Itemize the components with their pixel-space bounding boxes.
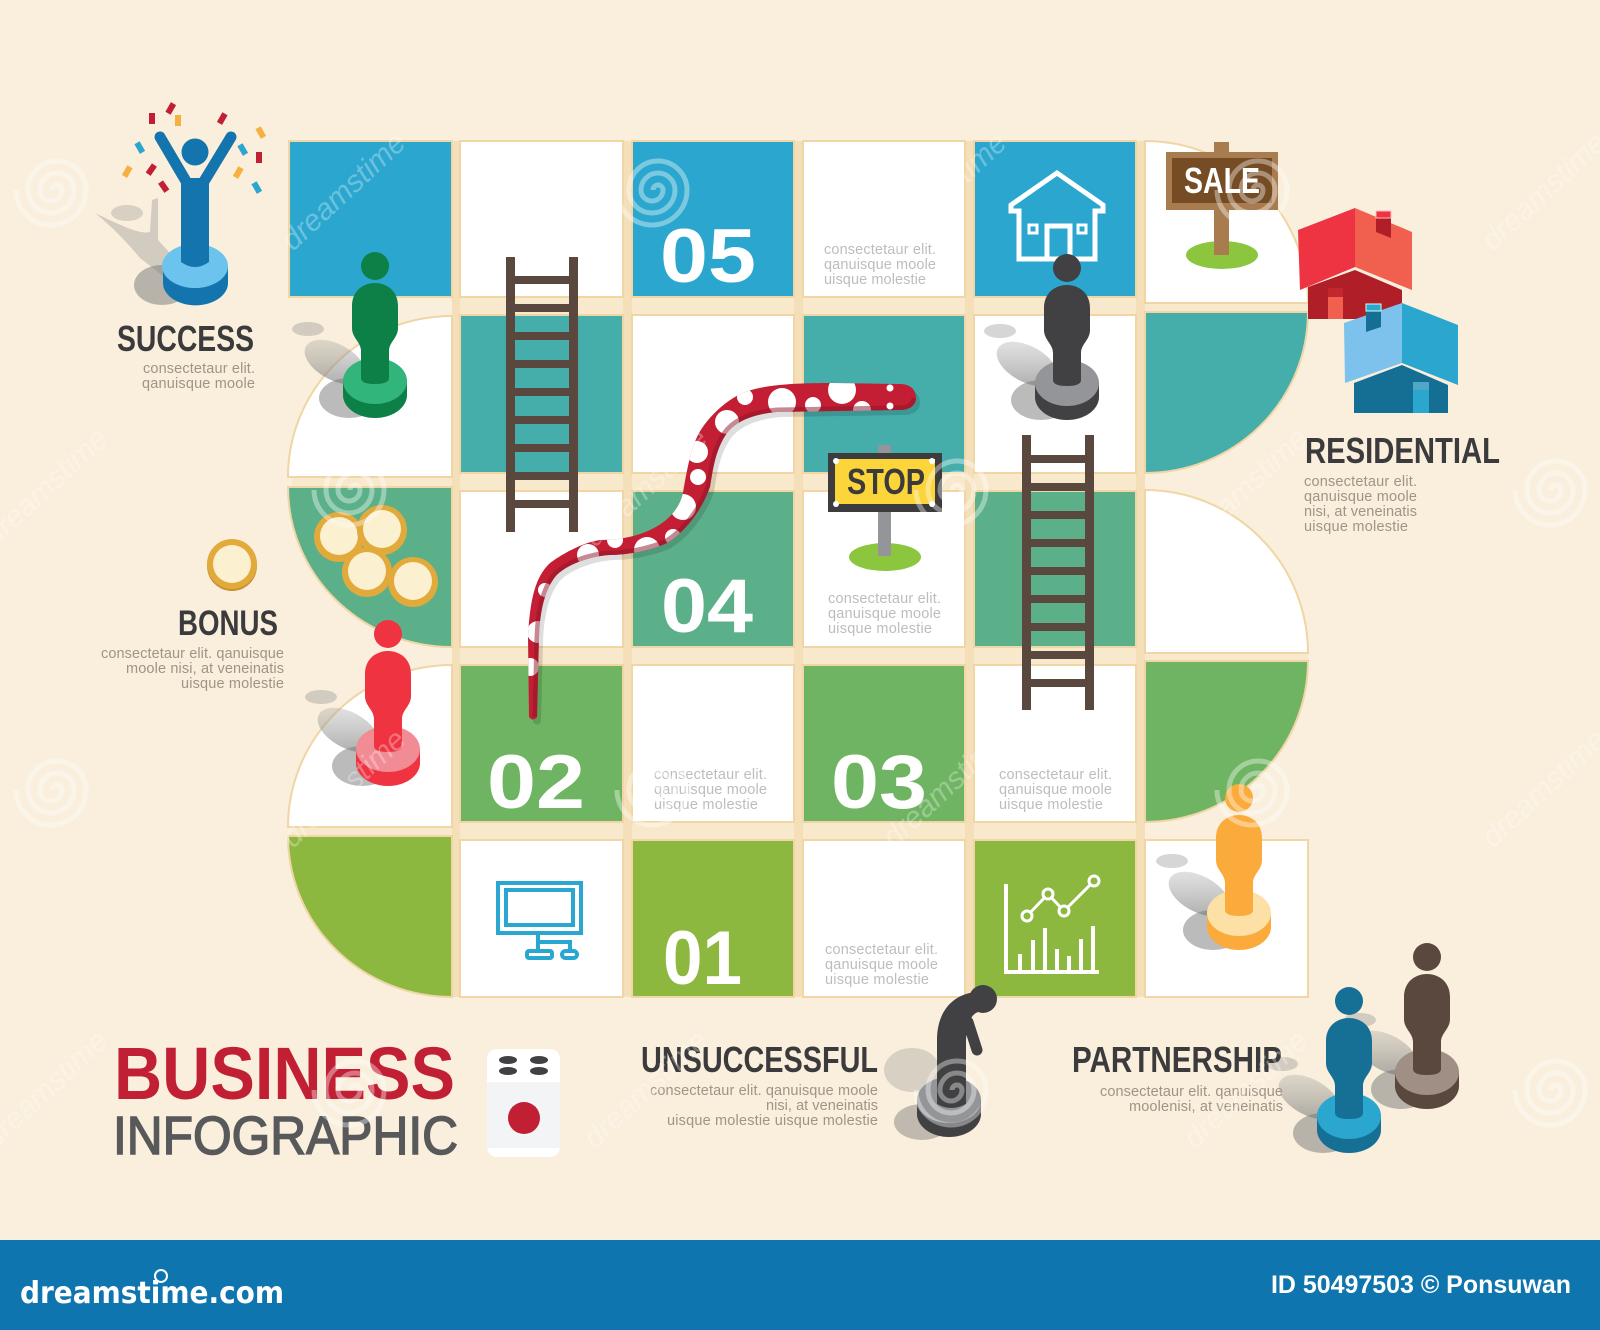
watermark text: dreamstime	[1177, 1024, 1314, 1155]
ladder right	[1022, 435, 1094, 710]
board gutters	[292, 141, 1308, 997]
coins on board	[314, 505, 438, 607]
watermark text: dreamstime	[876, 723, 1013, 854]
watermark text: dreamstime	[275, 723, 412, 854]
text: bonus description: moole nisi, at veneinatis	[126, 661, 284, 677]
cell text: step 01 neighbour	[825, 942, 938, 988]
cell text: step 03 neighbour: qanuisque moole	[999, 782, 1112, 798]
icon: house outline	[1011, 173, 1103, 259]
cell text: stop: qanuisque moole	[828, 606, 941, 622]
text: unsuccessful description: consectetaur elit. qanuisque moole	[650, 1083, 878, 1099]
watermark text: dreamstime	[577, 1024, 714, 1155]
heading: unsuccessful: UNSUCCESSFUL	[641, 1039, 878, 1080]
footer bar: dreamstime.com	[20, 1276, 284, 1311]
cell text: step 02 neighbour: uisque molestie	[654, 797, 758, 813]
text: unsuccessful description: nisi, at veneinatis	[766, 1098, 878, 1114]
watermark text: dreamstime	[577, 422, 714, 553]
heading: residential: RESIDENTIAL	[1305, 430, 1500, 471]
text: residential description	[1304, 474, 1417, 535]
text: residential description: uisque molestie	[1304, 519, 1408, 535]
number 02: 02	[487, 740, 585, 825]
icon: red house	[1298, 208, 1412, 319]
text: bonus description	[101, 646, 284, 692]
watermark spirals	[16, 161, 1585, 1125]
title: BUSINESS	[114, 1032, 455, 1115]
heading: bonus: BONUS	[178, 604, 278, 643]
cell text: step 02 neighbour: consectetaur elit.	[654, 767, 767, 783]
panel: game board	[288, 141, 1308, 997]
pawn: unsuccessful slumped figure	[884, 985, 997, 1140]
heading: partnership: PARTNERSHIP	[1072, 1039, 1282, 1080]
pawn: green	[292, 252, 407, 418]
board row 5	[288, 836, 1308, 997]
title: INFOGRAPHIC	[113, 1106, 458, 1166]
cell text: stop	[828, 591, 941, 637]
text: unsuccessful description	[650, 1083, 878, 1129]
cell text: step 02 neighbour: qanuisque moole	[654, 782, 767, 798]
snake	[521, 376, 920, 724]
ladder left	[506, 257, 578, 532]
stop sign	[828, 445, 942, 571]
sale sign	[1166, 142, 1278, 269]
footer bar	[0, 1240, 1600, 1330]
board row 2	[288, 312, 1308, 477]
cell text: step 05	[824, 242, 936, 288]
cell text: step 05: uisque molestie	[824, 272, 926, 288]
text: partnership description	[1100, 1084, 1283, 1115]
pawn: brown partner	[1344, 943, 1459, 1109]
number 04: 04	[661, 564, 753, 649]
pawn: blue partner	[1266, 987, 1381, 1153]
text: residential description: qanuisque moole	[1304, 489, 1417, 505]
cell text: step 03 neighbour	[999, 767, 1112, 813]
icon: growth chart	[1006, 876, 1099, 972]
pawn: success figure	[95, 102, 266, 305]
title	[113, 1032, 458, 1166]
cell text: step 03 neighbour: uisque molestie	[999, 797, 1103, 813]
number 03: 03	[831, 740, 927, 825]
cell text: step 05: consectetaur elit.	[824, 242, 936, 258]
text: success description: consectetaur elit.	[143, 361, 255, 377]
board row 4	[288, 661, 1308, 827]
text: residential description: nisi, at veneinatis	[1304, 504, 1417, 520]
cell text: step 01 neighbour: consectetaur elit.	[825, 942, 938, 958]
board row 1	[289, 141, 1308, 303]
stop sign: STOP	[847, 461, 925, 502]
number 01: 01	[663, 916, 742, 1001]
watermark text: dreamstime	[876, 126, 1013, 257]
icon: blue house	[1344, 303, 1458, 413]
cell text: stop: uisque molestie	[828, 621, 932, 637]
heading: success: SUCCESS	[117, 318, 254, 359]
pawn: red	[305, 620, 420, 786]
cell text: stop: consectetaur elit.	[828, 591, 941, 607]
watermark text: dreamstime	[1177, 422, 1314, 553]
number 05: 05	[660, 214, 756, 299]
cell text: step 02 neighbour	[654, 767, 767, 813]
icon: bonus coin	[207, 539, 257, 591]
text: unsuccessful description: uisque molestie uisque molestie	[667, 1113, 878, 1129]
icon: computer monitor	[498, 883, 581, 958]
icon: dice	[487, 1049, 560, 1157]
sale sign: SALE	[1184, 160, 1260, 201]
cell text: step 01 neighbour: uisque molestie	[825, 972, 929, 988]
text: bonus description: consectetaur elit. qanuisque	[101, 646, 284, 662]
text: residential description: consectetaur elit.	[1304, 474, 1417, 490]
text: bonus description: uisque molestie	[181, 676, 284, 692]
text: partnership description: moolenisi, at veneinatis	[1129, 1099, 1283, 1115]
pawn: grey	[984, 254, 1099, 420]
text: success description: qanuisque moole	[142, 376, 255, 392]
text: partnership description: consectetaur elit. qanuisque	[1100, 1084, 1283, 1100]
cell text: step 03 neighbour: consectetaur elit.	[999, 767, 1112, 783]
cell text: step 05: qanuisque moole	[824, 257, 936, 273]
board row 3	[288, 487, 1308, 653]
footer bar: ID 50497503 © Ponsuwan	[1271, 1271, 1571, 1299]
cell text: step 01 neighbour: qanuisque moole	[825, 957, 938, 973]
pawn: orange	[1156, 784, 1271, 950]
text: success description	[142, 361, 255, 392]
watermark text: dreamstime	[275, 126, 412, 257]
watermark text	[0, 126, 1600, 1155]
